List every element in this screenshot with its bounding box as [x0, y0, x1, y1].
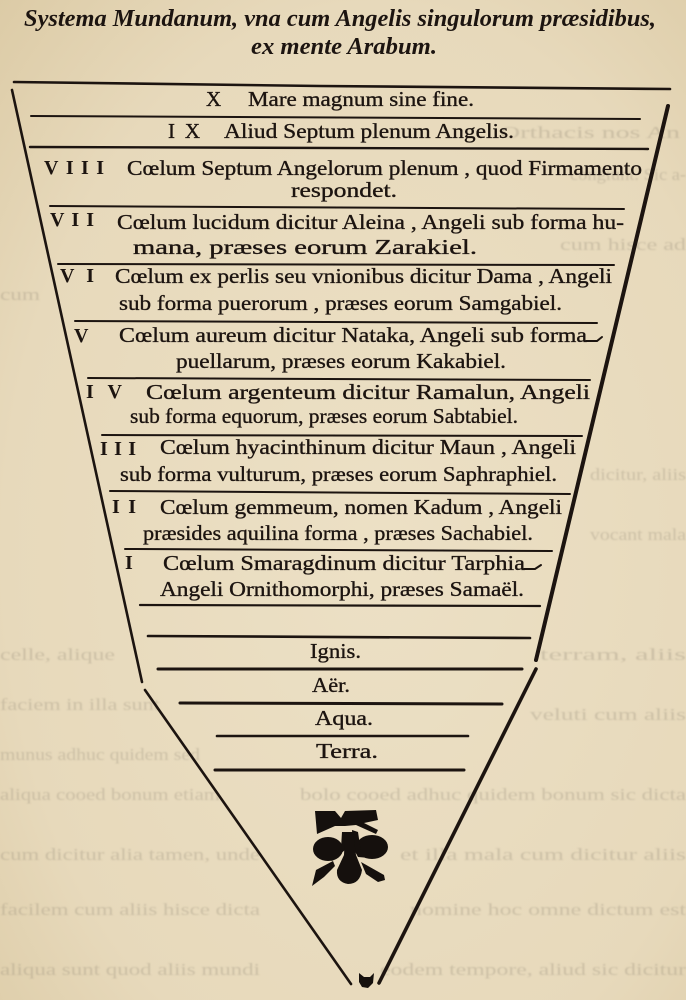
heaven VIII: respondet.: [291, 178, 397, 202]
show-through text from reverse page: facilem cum aliis hisce dicta: [0, 900, 261, 919]
element: Terra: Terra.: [316, 739, 378, 763]
heaven I: Angeli Ornithomorphi, præses Samaël.: [160, 577, 524, 601]
heaven VII: Cœlum lucidum dicitur Aleina , Angeli sub forma hu-: [117, 210, 624, 234]
heaven VI: [60, 264, 612, 315]
show-through text from reverse page: bolo cooed adhuc quidem bonum sic dicta: [300, 785, 686, 804]
heaven dividers: [30, 116, 648, 770]
heaven VI: Cœlum ex perlis seu vnionibus dicitur Dama , Angeli: [115, 264, 612, 288]
heaven VIII: [44, 156, 642, 202]
show-through text from reverse page: nomine hoc omne dictum est: [410, 900, 686, 919]
heaven III: [100, 435, 576, 486]
heaven IX: IX: [168, 119, 200, 143]
show-through text from reverse page: munus adhuc quidem sed: [0, 745, 201, 764]
show-through text from reverse page: faciem in illa sunt: [0, 695, 160, 714]
heaven II: Cœlum gemmeum, nomen Kadum , Angeli: [160, 495, 562, 519]
heaven V: Cœlum aureum dicitur Nataka, Angeli sub forma: [119, 323, 588, 347]
element: Ignis: Ignis.: [310, 639, 361, 663]
heaven VIII: VIII: [44, 157, 104, 179]
heaven X: Mare magnum sine fine.: [248, 87, 474, 111]
show-through text from reverse page: aliqua cooed bonum etiam: [0, 785, 220, 804]
heaven I: I: [125, 552, 133, 574]
show-through text from reverse page: celle, alique: [0, 645, 115, 664]
heaven IV: Cœlum argenteum dicitur Ramalun, Angeli: [146, 380, 590, 404]
heaven VI: VI: [60, 265, 94, 287]
heaven X: X: [206, 87, 221, 111]
title: Systema Mundanum, vna cum Angelis singulorum præsidibus,: [24, 6, 656, 32]
show-through text from reverse page: cum dicitur alia tamen, unde: [0, 845, 260, 864]
title: ex mente Arabum.: [251, 34, 437, 60]
element: Aer: Aër.: [312, 673, 350, 697]
heaven II: [112, 495, 562, 545]
heaven IV: IV: [86, 381, 123, 403]
heaven III: III: [100, 438, 136, 460]
heaven II: præsides aquilina forma , præses Sachabiel.: [143, 521, 533, 545]
heaven I: Cœlum Smaragdinum dicitur Tarphia: [163, 551, 526, 575]
show-through text from reverse page: et illa mala cum dicitur aliis: [400, 845, 686, 864]
right side of the upper triangle: [536, 106, 668, 660]
heaven V: V: [74, 325, 89, 347]
show-through text from reverse page: vocant mala: [590, 525, 686, 544]
heaven V: [74, 323, 602, 373]
heaven VI: sub forma puerorum , præses eorum Samgabiel.: [119, 291, 562, 315]
heaven VIII: Cœlum Septum Angelorum plenum , quod Firmamento: [127, 156, 642, 180]
icon: small ornament at the triangle apex: [359, 973, 374, 988]
show-through text from reverse page: dicitur, aliis: [590, 465, 686, 484]
show-through text from reverse page: cum hisce ad: [560, 235, 686, 254]
lower right side: [379, 669, 536, 983]
heaven VII: [50, 209, 624, 259]
title: [24, 6, 656, 60]
heaven I: [125, 551, 541, 601]
heaven II: II: [112, 496, 136, 518]
show-through text from reverse page: congiunt. Sic a-: [570, 165, 686, 184]
show-through text from reverse page: Orthacis nos An: [500, 123, 681, 142]
element: Aqua: Aqua.: [315, 706, 373, 730]
heaven III: Cœlum hyacinthinum dicitur Maun , Angeli: [160, 435, 576, 459]
heaven V: puellarum, præses eorum Kakabiel.: [176, 349, 506, 373]
show-through text from reverse page: terram, aliis: [540, 645, 686, 664]
heaven III: sub forma vulturum, præses eorum Saphraphiel.: [120, 462, 557, 486]
heaven VII: mana, præses eorum Zarakiel.: [133, 235, 477, 259]
show-through text from reverse page: cum: [0, 285, 40, 304]
show-through text from reverse page: veluti cum aliis: [530, 705, 686, 724]
lower left side: [145, 690, 351, 984]
left side of the triangle: [12, 90, 142, 682]
top rule: [14, 82, 670, 89]
heaven IV: sub forma equorum, præses eorum Sabtabiel.: [130, 404, 518, 428]
show-through text from reverse page: aliqua sunt quod aliis mundi: [0, 960, 260, 979]
heaven IV: [86, 380, 590, 428]
show-through text from reverse page: eodem tempore, aliud sic dicitur: [380, 960, 686, 979]
heaven IX: Aliud Septum plenum Angelis.: [224, 119, 514, 143]
heaven VII: VII: [50, 209, 94, 231]
icon: printer's floral ornament: [312, 810, 388, 886]
